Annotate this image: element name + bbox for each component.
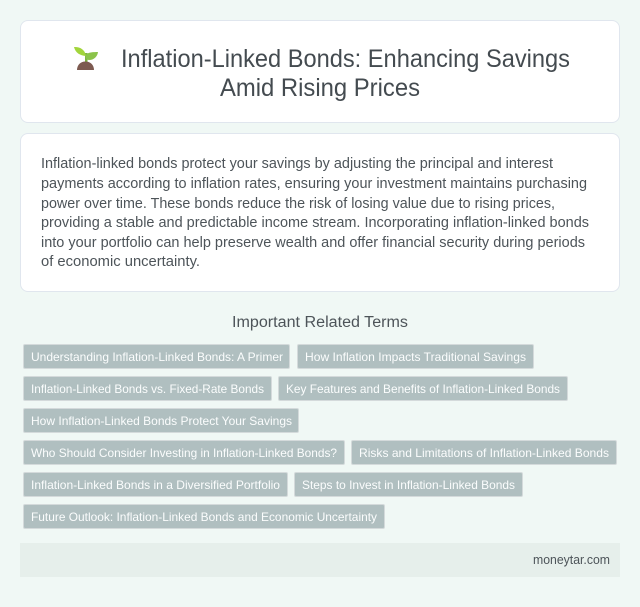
tag: future outlook	[23, 504, 385, 529]
tag: key features: Key Features and Benefits of Inflation-Linked Bonds	[286, 382, 560, 396]
tag: key features	[278, 376, 568, 401]
tag: risks	[351, 440, 617, 465]
panel: description	[20, 133, 620, 292]
text block: description paragraph: providing a stable and predictable income stream. Incorporating inflation-linked bonds	[41, 215, 589, 231]
tag: traditional savings	[297, 344, 534, 369]
tag: steps to invest	[294, 472, 523, 497]
tag: versus fixed-rate: Inflation-Linked Bonds vs. Fixed-Rate Bonds	[31, 382, 264, 396]
text block: description paragraph: payments according to inflation rates, ensuring your investment maintains purchasing	[41, 176, 587, 192]
tag: diversified portfolio	[23, 472, 288, 497]
footer	[20, 543, 620, 577]
heading: important related terms: Important Related Terms	[232, 314, 408, 331]
tag: risks: Risks and Limitations of Inflation-Linked Bonds	[359, 446, 609, 460]
tag: protect savings	[23, 408, 299, 433]
text block: description paragraph: power over time. These bonds reduce the risk of losing value due to rising prices,	[41, 196, 555, 212]
panel: title card	[20, 20, 620, 123]
tag: primer: Understanding Inflation-Linked Bonds: A Primer	[31, 350, 283, 364]
tag: steps to invest: Steps to Invest in Inflation-Linked Bonds	[302, 478, 515, 492]
tag: primer	[23, 344, 290, 369]
text block: description paragraph	[41, 156, 589, 270]
tag: who should invest: Who Should Consider Investing in Inflation-Linked Bonds?	[31, 446, 337, 460]
tag: traditional savings: How Inflation Impacts Traditional Savings	[305, 350, 526, 364]
icon: seedling	[74, 47, 98, 70]
footer source text: moneytar.com	[533, 553, 610, 567]
tag: versus fixed-rate	[23, 376, 272, 401]
title	[121, 45, 570, 102]
tag: future outlook: Future Outlook: Inflation-Linked Bonds and Economic Uncertainty	[31, 510, 377, 524]
text block: description paragraph: of economic uncertainty.	[41, 254, 200, 270]
tag: protect savings: How Inflation-Linked Bonds Protect Your Savings	[31, 414, 292, 428]
tag: diversified portfolio: Inflation-Linked Bonds in a Diversified Portfolio	[31, 478, 280, 492]
text block: description paragraph: Inflation-linked bonds protect your savings by adjusting the principal and interest	[41, 156, 553, 172]
title: Inflation-Linked Bonds: Enhancing Savings	[121, 45, 570, 73]
tag: who should invest	[23, 440, 345, 465]
title: Amid Rising Prices	[220, 74, 420, 102]
text block: description paragraph: into your portfolio can help preserve wealth and offer financial security during periods	[41, 235, 585, 251]
